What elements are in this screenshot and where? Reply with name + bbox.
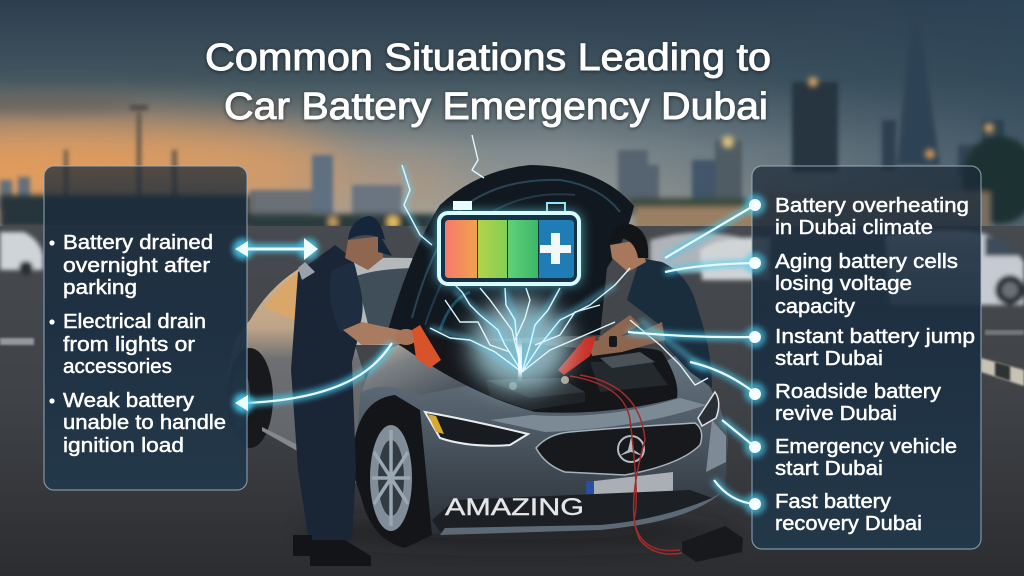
mechanic right: arms [588, 315, 665, 356]
car: shadow under car [305, 516, 735, 548]
mechanic left: hand [395, 329, 417, 345]
left list text: overnight after [63, 254, 210, 277]
left list text: Electrical drain [63, 310, 206, 333]
left list text: from lights or [63, 333, 195, 356]
car [227, 165, 735, 548]
car: headlight left [425, 412, 528, 446]
left list text: Weak battery [63, 389, 195, 412]
arrow: double-headed left top [233, 238, 318, 260]
battery icon: charge cells [445, 220, 574, 278]
car: lower bumper [432, 490, 712, 532]
mechanic left: orange clamp [412, 325, 441, 368]
panel: left causes [44, 166, 247, 490]
right list text: Battery overheating [775, 194, 969, 217]
right list text: revive Dubai [775, 402, 897, 425]
panel: right solutions [752, 166, 981, 549]
battery icon: plus sign [540, 233, 571, 264]
right list text: recovery Dubai [775, 512, 922, 535]
arrow: curved left bottom [233, 343, 392, 413]
right list text: Aging battery cells [775, 250, 958, 273]
mechanic right: torso [627, 258, 712, 388]
car: license plate [586, 472, 673, 503]
title: Common Situations Leading to [205, 37, 771, 79]
car: headlight right [698, 392, 719, 426]
car: battery [486, 376, 585, 410]
car: fender highlight [362, 345, 470, 395]
right list text: in Dubai climate [775, 216, 933, 239]
battery icon [437, 201, 581, 285]
left list text [49, 231, 226, 457]
lightning burst from battery [402, 135, 708, 391]
background: tree line and distant buildings [0, 77, 1024, 232]
left list text: Battery drained [63, 231, 213, 254]
arrows: six connectors to right panel [628, 198, 762, 511]
car: front fender and body [355, 340, 728, 534]
car: open hood [388, 165, 634, 345]
right list text: Instant battery jump [775, 325, 975, 348]
watermark: AMAZING [445, 494, 584, 521]
car: side window [265, 272, 300, 322]
jumper cables and booster box [570, 375, 743, 562]
mechanic left: torso and legs [291, 245, 360, 548]
right list text: losing voltage [775, 272, 912, 295]
mechanic left: sleeve badge [336, 289, 354, 298]
left list text: parking [63, 276, 137, 299]
right list text: Emergency vehicle [775, 435, 957, 458]
car: emblem [618, 436, 644, 462]
title: Car Battery Emergency Dubai [224, 86, 768, 128]
car: side body [228, 265, 372, 490]
mechanic left [291, 216, 441, 566]
mechanic right [558, 224, 712, 388]
car: hood lip highlight [490, 398, 706, 432]
right list text: start Dubai [775, 457, 883, 480]
car: roof and windshield [300, 258, 420, 345]
car: engine bay [397, 336, 677, 413]
mechanic right: head [608, 224, 648, 272]
background: blurred skyline [0, 5, 1004, 218]
background: parking lot road [0, 226, 1024, 576]
car: front wheel [352, 395, 432, 548]
right list text: start Dubai [775, 347, 883, 370]
left list text: unable to handle [63, 411, 226, 434]
right list text: Fast battery [775, 490, 892, 513]
left list text: ignition load [63, 434, 184, 457]
right list text: Roadside battery [775, 380, 942, 403]
mechanic right: red clamp [558, 336, 596, 375]
mechanic left: head and cap [345, 216, 392, 270]
mechanic right: watch [609, 336, 617, 347]
right list text: capacity [775, 295, 856, 318]
car: grille [536, 423, 702, 475]
car: side sill [262, 427, 376, 492]
left list text: accessories [63, 355, 172, 378]
car: rear wheel [227, 348, 273, 448]
mechanic left: arm [330, 262, 402, 345]
mechanic left: boots [293, 535, 371, 566]
title [205, 37, 771, 128]
battery icon: terminals [453, 201, 565, 211]
car: engine parts [590, 360, 668, 392]
background: parked cars [0, 230, 1024, 305]
background: dusk sky [0, 0, 1024, 240]
right list text [775, 194, 975, 535]
